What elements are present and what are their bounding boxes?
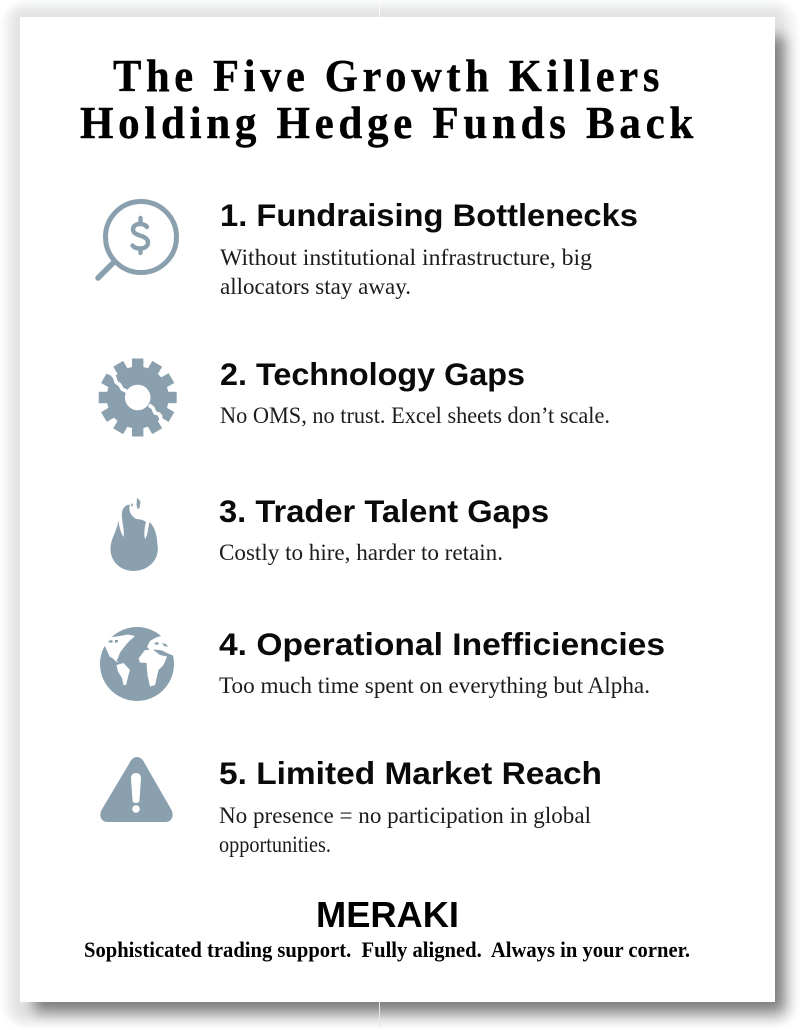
text: market reach description <box>219 803 591 857</box>
text: market reach description: No presence = no participation in global <box>219 803 591 828</box>
logo: Meraki wordmark: MERAKI <box>316 894 459 935</box>
icon: warning triangle <box>100 757 173 822</box>
heading: operational inefficiencies: 4. Operational Inefficiencies <box>219 626 665 662</box>
item 5: limited market reach <box>100 755 602 857</box>
icon: flame <box>110 498 158 571</box>
icon: magnifying glass with dollar sign <box>98 202 176 278</box>
text: fundraising description: allocators stay away. <box>220 274 411 299</box>
text: fundraising description <box>220 245 593 299</box>
item 2: technology gaps <box>99 356 610 436</box>
title: The Five Growth Killers <box>113 50 664 101</box>
item 4: operational inefficiencies <box>100 626 665 701</box>
icon: globe <box>100 627 179 701</box>
text: market reach description: opportunities. <box>219 832 331 857</box>
heading: technology gaps: 2. Technology Gaps <box>220 356 525 392</box>
heading: trader talent gaps: 3. Trader Talent Gaps <box>219 493 549 529</box>
icon: broken gear <box>99 358 177 436</box>
heading: fundraising bottlenecks: 1. Fundraising Bottlenecks <box>220 197 638 233</box>
heading: limited market reach: 5. Limited Market Reach <box>219 755 602 791</box>
item 1: fundraising bottlenecks <box>98 197 638 299</box>
text: talent description: Costly to hire, harder to retain. <box>219 540 503 565</box>
text: fundraising description: Without institutional infrastructure, big <box>220 245 593 270</box>
text: technology description: No OMS, no trust. Excel sheets don’t scale. <box>220 403 610 428</box>
tagline: Sophisticated trading support. Fully aligned. Always in your corner. <box>84 937 690 962</box>
text: operations description: Too much time spent on everything but Alpha. <box>219 673 650 698</box>
title <box>80 50 698 148</box>
title: Holding Hedge Funds Back <box>80 97 698 148</box>
item 3: trader talent gaps <box>110 493 549 571</box>
